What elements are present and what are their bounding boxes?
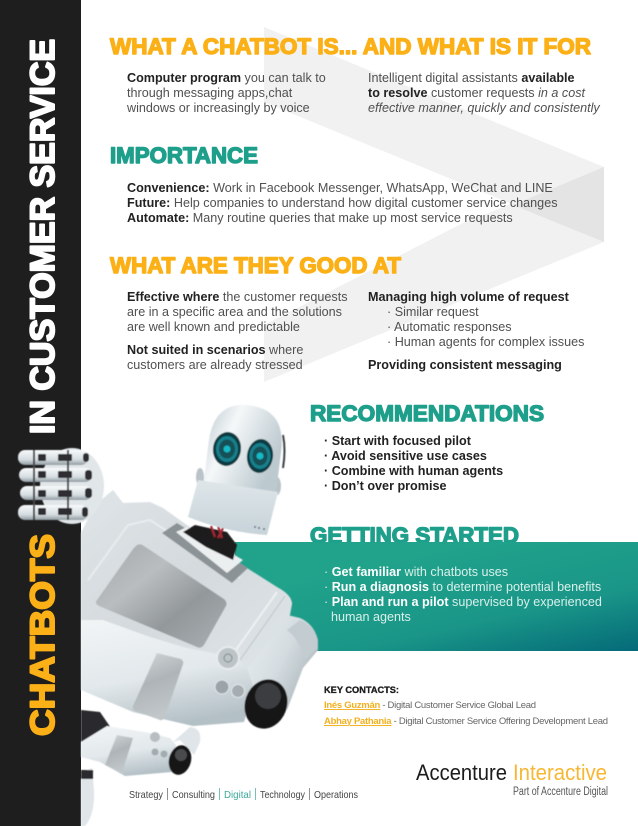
- footer: service lines: Strategy: [129, 789, 164, 801]
- robot right eye: [245, 437, 275, 475]
- robot chest panel: [96, 544, 227, 648]
- text block: getting started list: · Get familiar with chatbots uses: [324, 565, 508, 579]
- sidebar title: IN CUSTOMER SERVICE: [24, 39, 62, 434]
- left black sidebar: [0, 0, 81, 826]
- robot black wheel: [238, 673, 294, 735]
- heading: what are they good at: WHAT ARE THEY GOOD AT: [110, 253, 401, 278]
- text block: managing high volume: Providing consistent messaging: [368, 358, 562, 372]
- key contacts: [324, 685, 608, 727]
- heading: recommendations: RECOMMENDATIONS: [310, 401, 544, 426]
- background chevron: [264, 27, 604, 382]
- text block: chatbot purpose: Intelligent digital assistants available: [368, 71, 575, 85]
- key contacts: Inés Guzmán - Digital Customer Service Global Lead: [324, 700, 536, 711]
- key contacts: KEY CONTACTS:: [324, 685, 399, 696]
- text block: chatbot purpose: to resolve customer requests in a cost: [368, 86, 585, 100]
- text block: chatbot purpose: effective manner, quickly and consistently: [368, 101, 600, 115]
- text block: getting started list: · Plan and run a pilot supervised by experienced: [324, 595, 602, 609]
- heading: getting started: GETTING STARTED: [310, 523, 519, 548]
- robot lower shoulder: [81, 768, 94, 826]
- text block: effective where: customers are already stressed: [127, 358, 303, 372]
- text block: recommendations list: · Combine with human agents: [324, 464, 503, 478]
- robot small arm: [81, 726, 200, 777]
- robot head: [188, 401, 286, 535]
- text block: importance list: Automate: Many routine queries that make up most service requests: [127, 211, 513, 225]
- text block: getting started list: human agents: [331, 610, 411, 624]
- robot lower mechanics: [81, 710, 111, 757]
- text block: effective where: Not suited in scenarios where: [127, 343, 303, 357]
- text block: recommendations list: · Start with focused pilot: [324, 434, 472, 448]
- logo: Accenture Interactive: Accenture: [416, 760, 507, 785]
- text block: recommendations list: · Don’t over promise: [324, 479, 446, 493]
- logo: Accenture Interactive: [416, 760, 608, 798]
- robot hand: [18, 448, 104, 524]
- sidebar title: CHATBOTS: [24, 534, 62, 736]
- text block: effective where: are in a specific area and the solutions: [127, 305, 342, 319]
- logo: Accenture Interactive: Part of Accenture Digital: [513, 786, 608, 798]
- footer: service lines: [129, 788, 358, 801]
- text block: effective where: Effective where the customer requests: [127, 290, 348, 304]
- text block: chatbot definition: through messaging apps,chat: [127, 86, 293, 100]
- text block: importance list: Convenience: Work in Facebook Messenger, WhatsApp, WeChat and LINE: [127, 181, 553, 195]
- text block: recommendations list: · Avoid sensitive use cases: [324, 449, 487, 463]
- robot forearm: [81, 620, 254, 726]
- text block: managing high volume: · Similar request: [387, 305, 479, 319]
- text block: getting started list: · Run a diagnosis to determine potential benefits: [324, 580, 601, 594]
- robot silver band: [133, 653, 183, 720]
- text block: managing high volume: · Automatic responses: [387, 320, 512, 334]
- robot torso: [81, 490, 292, 675]
- logo: Accenture Interactive: Interactive: [513, 760, 607, 785]
- footer: service lines: Operations: [314, 789, 358, 801]
- sidebar title: [24, 39, 62, 736]
- footer: service lines: Technology: [260, 789, 306, 801]
- robot neck mount: [162, 523, 248, 583]
- robot left eye: [211, 430, 243, 468]
- footer: service lines: Consulting: [172, 789, 215, 801]
- key contacts: Abhay Pathania - Digital Customer Service Offering Development Lead: [324, 716, 608, 727]
- text block: managing high volume: Managing high volume of request: [368, 290, 570, 304]
- heading: what a chatbot is: WHAT A CHATBOT IS... AND WHAT IS IT FOR: [110, 34, 591, 59]
- heading: importance: IMPORTANCE: [110, 143, 258, 168]
- text block: effective where: are well known and predictable: [127, 320, 300, 334]
- panel: getting started: [235, 542, 638, 651]
- text block: chatbot definition: windows or increasingly by voice: [126, 101, 310, 115]
- text block: chatbot definition: Computer program you can talk to: [127, 71, 326, 85]
- illustration: robot: [18, 401, 318, 826]
- footer: service lines: Digital: [224, 789, 251, 801]
- text block: managing high volume: · Human agents for complex issues: [387, 335, 584, 349]
- text block: importance list: Future: Help companies to understand how digital customer service changes: [127, 196, 558, 210]
- robot rear elbow: [240, 612, 318, 710]
